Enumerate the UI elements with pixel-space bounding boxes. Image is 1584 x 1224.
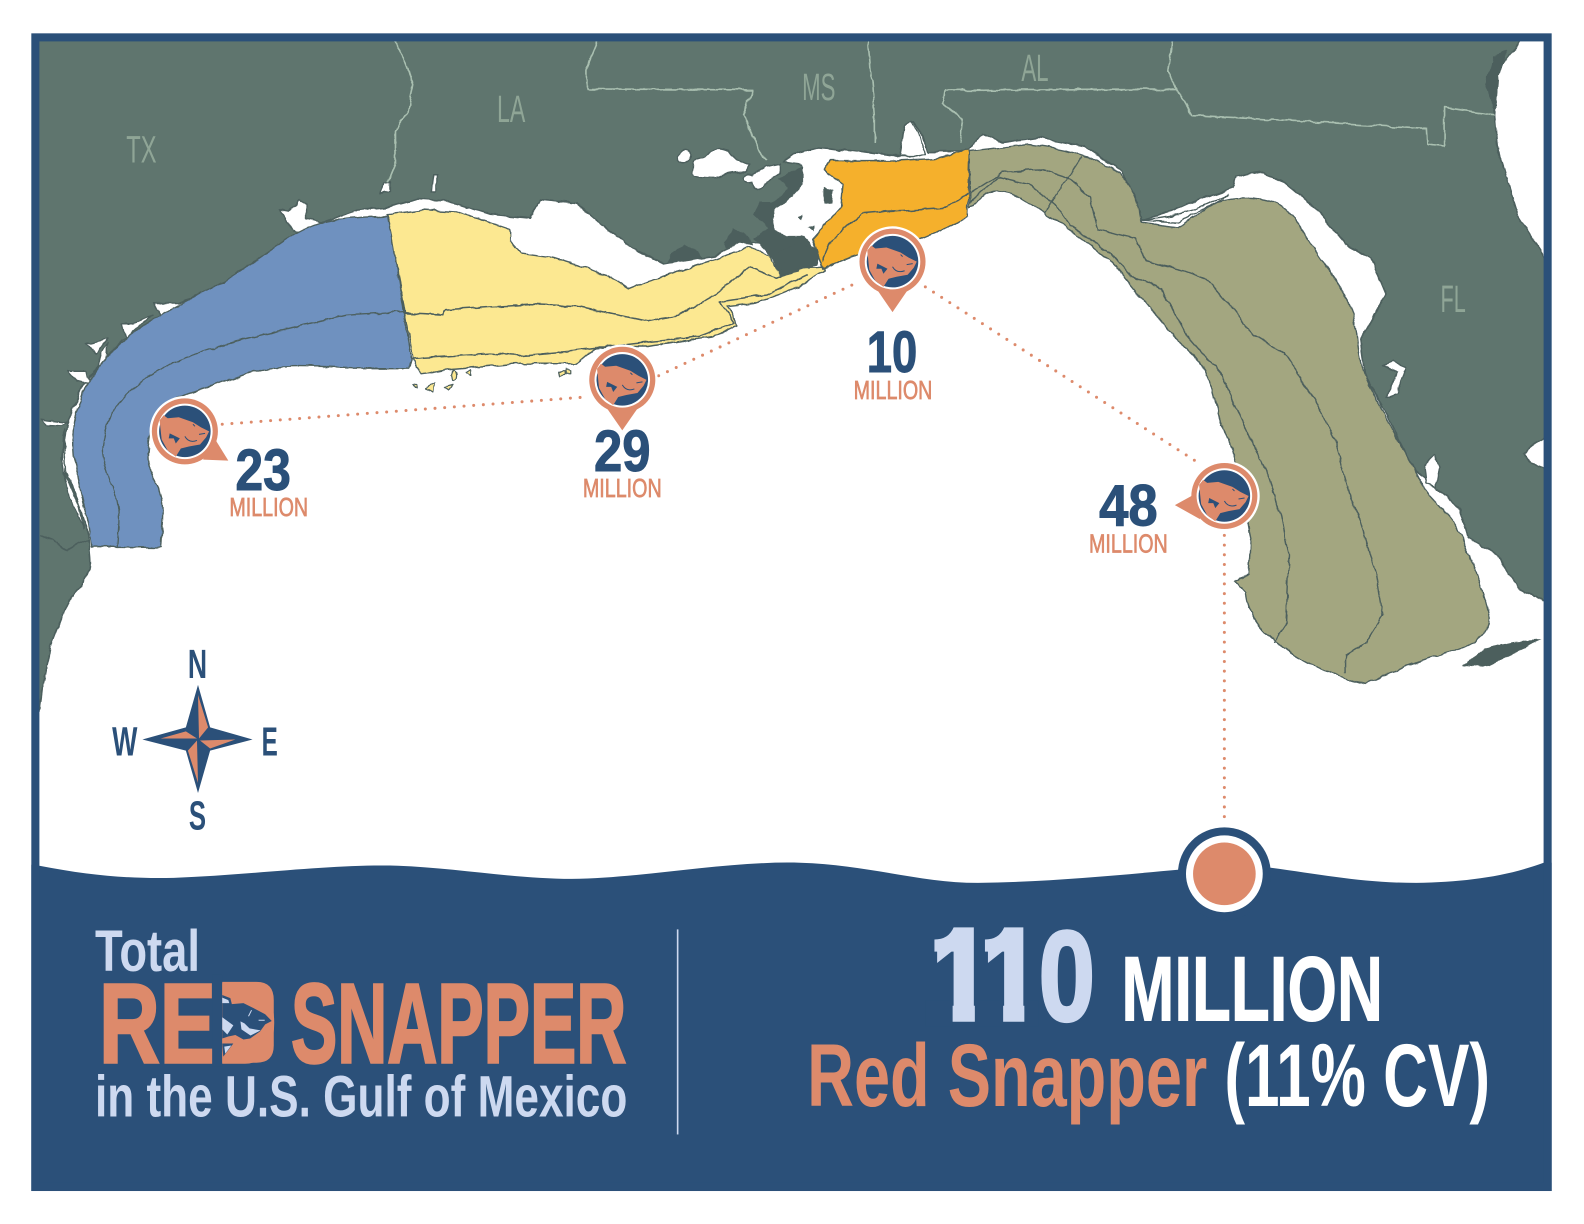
connector: west to west-central <box>222 397 586 424</box>
value: 48 million: MILLION <box>1089 529 1168 559</box>
region: Florida (olive) <box>970 144 1489 684</box>
total number: 110: 110 <box>931 905 1095 1048</box>
Florida contour B <box>970 177 1289 642</box>
lakes, bays and lagoons <box>40 121 1552 528</box>
value: 10 million: 10 <box>867 320 917 385</box>
value: 10 million <box>854 320 932 405</box>
Lake Okeechobee <box>1522 438 1544 468</box>
total marker circle <box>1178 827 1271 920</box>
value: 29 million: 29 <box>594 419 651 484</box>
value: 29 million: MILLION <box>583 473 662 503</box>
land <box>25 25 1556 712</box>
state label: TX: TX <box>126 129 157 172</box>
value: 29 million <box>583 419 662 503</box>
region: Mississippi-Alabama (orange) <box>812 150 970 269</box>
state borders <box>388 30 1495 182</box>
subtitle: Red Snapper: Red Snapper <box>807 1026 1207 1125</box>
TX-LA border <box>388 30 413 182</box>
Sabine Lake <box>380 182 390 194</box>
region: Louisiana (yellow) <box>388 210 824 392</box>
map <box>25 25 1556 712</box>
state label: AL: AL <box>1021 47 1049 90</box>
Lake Borgne <box>744 164 780 190</box>
dotted connector lines <box>222 283 1224 823</box>
Florida contour A <box>970 170 1383 673</box>
Louisiana lower contour <box>411 275 808 359</box>
value: 23 million: MILLION <box>229 492 308 522</box>
letter D solid with fish cut-out <box>212 975 274 1067</box>
marsh and delta <box>667 51 1507 277</box>
Florida cross line <box>1045 157 1082 213</box>
heading word: RED: RED <box>99 961 277 1087</box>
connector: central to east <box>925 287 1198 463</box>
heading: Total Red Snapper in the U.S. Gulf of Mexico <box>95 919 627 1129</box>
pin: Texas <box>150 396 228 467</box>
Mobile Bay <box>899 121 924 157</box>
Louisiana islets <box>413 370 571 392</box>
pin: Louisiana <box>587 344 658 430</box>
heading line: in the U.S. Gulf of Mexico: in the U.S. Gulf of Mexico <box>95 1064 627 1129</box>
value: 23 million: 23 <box>235 438 291 503</box>
Galveston Bay <box>281 200 321 234</box>
connector: west-central to central <box>659 283 857 376</box>
compass S: S <box>189 792 206 838</box>
state label: MS: MS <box>802 66 835 109</box>
Florida Keys <box>1463 640 1542 667</box>
Calcasieu Lake <box>431 175 436 191</box>
region: Texas (blue) <box>73 216 411 548</box>
value: 48 million: 48 <box>1099 473 1158 538</box>
value: 10 million: MILLION <box>854 375 932 405</box>
heading word: SNAPPER: SNAPPER <box>291 961 626 1087</box>
state label: LA: LA <box>497 88 526 131</box>
MS-AL border <box>868 30 875 142</box>
Texas lagoons <box>40 291 207 528</box>
compass rose <box>112 641 278 838</box>
delta islets <box>798 186 834 264</box>
value: 48 million <box>1089 473 1168 559</box>
pin: Florida <box>1175 461 1260 531</box>
Lake Maurepas <box>677 150 691 164</box>
AL-FL border <box>943 30 1495 146</box>
compass star <box>142 685 253 793</box>
connector: east to total <box>1223 535 1226 823</box>
Mississippi Sound <box>772 164 819 266</box>
compass N: N <box>188 641 207 687</box>
state label: FL: FL <box>1441 278 1466 321</box>
Louisiana upper contour <box>403 268 798 321</box>
divider <box>677 929 678 1134</box>
Charlotte Harbor <box>1424 455 1440 487</box>
Lake Pontchartrain <box>692 149 750 178</box>
Tampa Bay <box>1383 362 1406 398</box>
Rio Grande <box>39 535 89 551</box>
pin: Mississippi-Alabama <box>857 226 928 312</box>
heading line: Total: Total <box>95 919 200 984</box>
compass W: W <box>112 719 138 765</box>
total figure <box>807 905 1490 1125</box>
Apalachicola bays <box>1142 195 1227 222</box>
orange contour <box>822 193 968 262</box>
LA-MS border <box>587 30 766 161</box>
value: 23 million <box>229 438 308 522</box>
total unit: MILLION: MILLION <box>1121 938 1383 1040</box>
bottom wave banner <box>31 863 1552 1191</box>
Texas depth contour <box>103 312 403 548</box>
compass E: E <box>262 719 278 765</box>
